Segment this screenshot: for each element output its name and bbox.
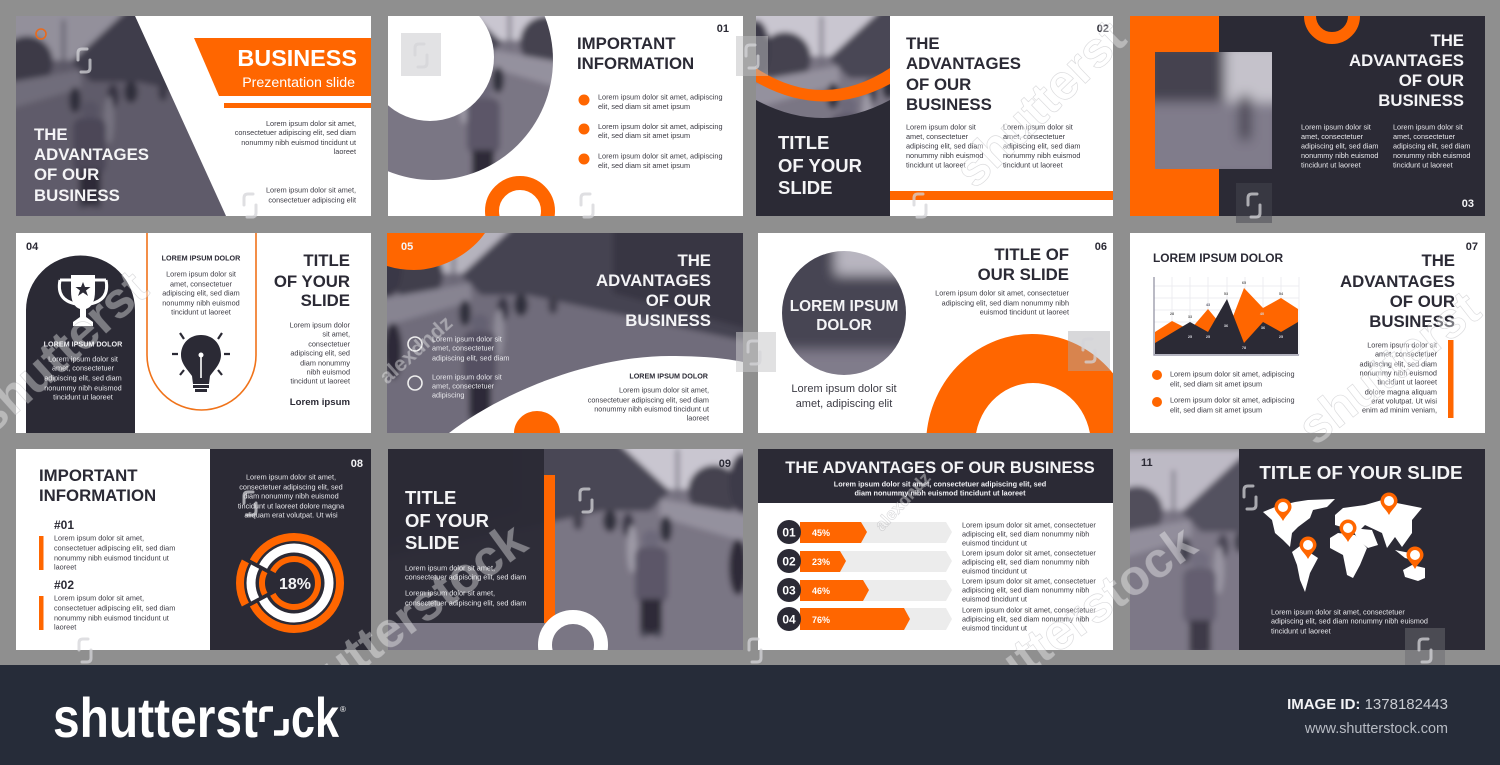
- icon: small orange ring: [36, 29, 46, 39]
- heading: BUSINESS: [906, 95, 992, 114]
- heading: OF OUR: [1390, 292, 1455, 311]
- orange arc band: [756, 68, 890, 102]
- label: LOREM IPSUM DOLOR: [44, 340, 123, 348]
- row 02 23%: adipiscing elit, sed diam nonummy nibh: [962, 558, 1089, 566]
- text block: tincidunt ut laoreet dolore magna: [238, 502, 345, 510]
- item #01: laoreet: [54, 562, 76, 572]
- text block: consectetuer: [308, 340, 351, 348]
- white curved panel: [449, 356, 743, 433]
- caption: amet, adipiscing elit: [796, 398, 892, 410]
- list item: [408, 372, 502, 400]
- item #01: Lorem ipsum dolor sit amet,: [54, 534, 144, 542]
- text column: adipiscing elit, sed diam: [1393, 142, 1470, 150]
- text column: amet, consectetuer: [1301, 132, 1364, 141]
- row 01 45%: Lorem ipsum dolor sit amet, consectetuer: [962, 520, 1096, 530]
- text block: nonummy nibh euismod: [44, 384, 122, 392]
- orange bar: [544, 475, 555, 623]
- watermark text: alexdndz: [375, 311, 457, 389]
- text column: Lorem ipsum dolor sit: [1393, 122, 1463, 132]
- text block: adipiscing elit, sed diam nonummy nibh: [942, 298, 1069, 308]
- row 04 76%: adipiscing elit, sed diam nonummy nibh: [962, 614, 1089, 624]
- item #02: laoreet: [54, 622, 76, 632]
- area chart: 65: [1242, 281, 1246, 285]
- heading: OF OUR: [646, 291, 711, 310]
- row 03 46%: euismod tincidunt ut: [962, 594, 1027, 604]
- text block: nonummy nibh euismod: [162, 298, 240, 308]
- watermark text: shutterst: [1287, 280, 1491, 456]
- text block: amet, consectetuer: [170, 280, 233, 288]
- page number: 08: [351, 458, 363, 470]
- heading: the advantages: THE: [34, 125, 68, 144]
- area chart: 40: [1260, 312, 1264, 316]
- pin: australia: [1406, 546, 1424, 569]
- text block: dolore magna aliquam: [1365, 388, 1437, 396]
- text column: Lorem ipsum dolor sit: [1003, 122, 1073, 132]
- slide 06: circle photo and arch: [758, 233, 1113, 433]
- footer logo: shutterst: [53, 686, 258, 749]
- text column: tincidunt ut laoreet: [1301, 160, 1361, 170]
- heading: BUSINESS: [1369, 312, 1455, 331]
- heading: BUSINESS: [1378, 91, 1464, 110]
- list item: amet, consectetuer: [432, 344, 495, 352]
- text block: nonummy nibh euismod: [1360, 368, 1437, 378]
- orange arch: [926, 334, 1113, 433]
- photo: street scene: [388, 449, 743, 650]
- heading: THE: [1421, 251, 1455, 270]
- row 03 46%: 46%: [812, 586, 830, 596]
- text column: Lorem ipsum dolor sit: [906, 122, 976, 132]
- text block: Lorem ipsum dolor sit amet,: [405, 588, 495, 598]
- banner stripe: [224, 103, 371, 108]
- area chart: 28: [1170, 312, 1174, 316]
- slide 02: advantages with columns: [756, 16, 1113, 216]
- text block: aliquam erat volutpat. Ut wisi: [244, 510, 338, 520]
- text block: Lorem ipsum dolor sit amet, consectetuer: [935, 288, 1070, 298]
- heading: THE: [906, 34, 940, 53]
- chart title: LOREM IPSUM DOLOR: [1153, 251, 1284, 265]
- text block: Lorem ipsum dolor sit amet,: [266, 119, 356, 128]
- text column: nonummy nibh euismod: [1301, 151, 1378, 160]
- page number: 03: [1462, 198, 1474, 210]
- pin: south america: [1300, 536, 1316, 559]
- footer bar: [0, 665, 1500, 765]
- heading: title of your slide: TITLE: [778, 132, 829, 153]
- list item: amet, consectetuer: [432, 382, 495, 390]
- area chart: 33: [1188, 315, 1192, 319]
- dark panel: [388, 449, 544, 623]
- list item: Lorem ipsum dolor sit: [432, 334, 502, 344]
- heading: the advantages: OF OUR: [34, 165, 99, 184]
- watermark text: shutterstock: [931, 513, 1207, 735]
- row 02 23%: [777, 548, 1096, 576]
- text block: consectetuer adipiscing elit, sed diam: [405, 598, 526, 608]
- list item: adipiscing elit, sed diam: [432, 354, 509, 362]
- page number: 07: [1466, 241, 1478, 253]
- text block: amet, consectetuer: [1375, 350, 1438, 358]
- area chart: 78: [1242, 346, 1246, 350]
- heading: IMPORTANT: [39, 466, 138, 485]
- area chart: 54: [1279, 292, 1284, 296]
- text block: diam nonummy nibh euismod: [243, 492, 339, 500]
- row 01 45%: 45%: [812, 528, 830, 538]
- icon: trophy: [59, 275, 107, 326]
- heading: ADVANTAGES: [1340, 272, 1455, 291]
- text column: tincidunt ut laoreet: [906, 160, 966, 170]
- watermark text: alexdndz: [871, 469, 935, 535]
- text column: nonummy nibh euismod: [906, 151, 983, 160]
- orange side panel: [1130, 16, 1219, 216]
- caption: Lorem ipsum dolor sit: [791, 383, 897, 395]
- text block: adipiscing elit, sed diam: [44, 374, 122, 382]
- text block: diam nonummy: [300, 358, 350, 368]
- text column: nonummy nibh euismod: [1003, 151, 1080, 160]
- area chart: [1154, 277, 1299, 355]
- text block: consectetuer adipiscing elit, sed: [239, 482, 343, 492]
- item #02: #02: [54, 578, 74, 592]
- list item: [408, 334, 509, 362]
- subheading: Lorem ipsum dolor sit amet, consectetuer adipiscing elit, sed: [834, 480, 1046, 488]
- page number: 04: [26, 241, 39, 253]
- item #02: Lorem ipsum dolor sit amet,: [54, 594, 144, 602]
- area chart: 53: [1224, 292, 1228, 296]
- item #02: consectetuer adipiscing elit, sed diam: [54, 604, 175, 612]
- text block: euismod tincidunt ut laoreet: [980, 308, 1069, 316]
- heading: SLIDE: [301, 291, 350, 310]
- row 02 23%: euismod tincidunt ut: [962, 566, 1027, 576]
- subheading: diam nonummy nibh euismod tincidunt ut laoreet: [854, 488, 1026, 498]
- text block: adipiscing elit, sed diam nonummy nibh euismod: [1271, 616, 1428, 626]
- watermark text: shutterst: [944, 9, 1137, 198]
- heading: the advantages: ADVANTAGES: [34, 145, 149, 164]
- text block: consectetuer adipiscing elit, sed diam: [405, 572, 526, 582]
- heading: OF YOUR: [405, 510, 489, 531]
- row 01 45%: adipiscing elit, sed diam nonummy nibh: [962, 530, 1089, 538]
- text column: adipiscing elit, sed diam: [906, 142, 983, 150]
- heading: ADVANTAGES: [1349, 51, 1464, 70]
- heading: TITLE: [303, 251, 350, 270]
- heading: TITLE OF: [994, 245, 1069, 264]
- text block: tincidunt ut laoreet: [171, 308, 231, 316]
- page number: 05: [401, 241, 413, 253]
- area chart: 43: [1206, 303, 1210, 307]
- pin: africa: [1340, 520, 1356, 542]
- area chart: 25: [1279, 335, 1283, 339]
- text block: sit amet,: [322, 330, 350, 338]
- text block: erat volutpat. Ut wisi: [1371, 396, 1437, 406]
- text block: nibh euismod: [307, 368, 350, 376]
- text block: tincidunt ut laoreet: [1271, 626, 1331, 636]
- row 03 46%: [777, 576, 1096, 604]
- slide 04: trophy and bulb: [16, 233, 371, 433]
- item #02: nonummy nibh euismod tincidunt ut: [54, 614, 169, 622]
- watermark marks: [78, 33, 1445, 670]
- heading: OF YOUR: [274, 272, 350, 291]
- item #01: #01: [54, 518, 74, 532]
- bullet list: [578, 92, 723, 170]
- slide 01: important information: [388, 16, 743, 216]
- heading: TITLE: [405, 487, 456, 508]
- bullet list: elit, sed diam sit amet ipsum: [1170, 380, 1262, 388]
- photo: street background: [387, 233, 743, 433]
- white ring: [538, 610, 608, 650]
- text column: adipiscing elit, sed diam: [1301, 142, 1378, 150]
- text column: amet, consectetuer: [906, 132, 969, 141]
- heading: title of your slide: SLIDE: [778, 177, 832, 198]
- bullet list: Lorem ipsum dolor sit amet, adipiscing: [598, 122, 723, 131]
- text block: nonummy nibh euismod tincidunt ut: [241, 138, 356, 147]
- text column: tincidunt ut laoreet: [1003, 160, 1063, 170]
- row 02 23%: 23%: [812, 557, 830, 567]
- bullet list: Lorem ipsum dolor sit amet, adipiscing: [598, 152, 723, 160]
- heading: BUSINESS: [625, 311, 711, 330]
- orange bar: [1448, 340, 1454, 418]
- row 04 76%: 04: [782, 612, 796, 626]
- text block: Lorem ipsum dolor sit: [48, 354, 118, 364]
- bullet list: Lorem ipsum dolor sit amet, adipiscing: [1170, 396, 1295, 404]
- slide 05: full photo: [387, 233, 743, 433]
- slide: business title: [16, 16, 371, 216]
- banner: business: [194, 38, 371, 96]
- dark panel: [210, 449, 371, 650]
- orange corner shape: [387, 233, 485, 270]
- row 01 45%: euismod tincidunt ut: [962, 538, 1027, 548]
- icon: light bulb: [172, 333, 230, 392]
- heading: ADVANTAGES: [596, 271, 711, 290]
- orange ring: [1310, 0, 1354, 38]
- area chart: 25: [1188, 335, 1192, 339]
- slide 11: world map: [1130, 449, 1485, 650]
- pin: north america: [1274, 498, 1292, 521]
- text block: laoreet: [687, 414, 709, 422]
- heading: THE: [1430, 31, 1464, 50]
- circle label: LOREM IPSUM: [790, 298, 898, 315]
- row 02 23%: Lorem ipsum dolor sit amet, consectetuer: [962, 548, 1096, 558]
- label: LOREM IPSUM DOLOR: [162, 254, 241, 262]
- dark panel: [1239, 449, 1485, 650]
- world map: [1263, 499, 1425, 592]
- item #01: [39, 518, 175, 572]
- bullet list: Lorem ipsum dolor sit amet, adipiscing: [1170, 370, 1295, 378]
- row 01 45%: 01: [782, 526, 796, 540]
- footer logo: ®: [340, 705, 346, 714]
- heading: INFORMATION: [577, 54, 694, 73]
- heading: TITLE OF YOUR SLIDE: [1259, 462, 1463, 483]
- item #01: nonummy nibh euismod tincidunt ut: [54, 554, 169, 562]
- text block: tincidunt ut laoreet: [53, 392, 113, 402]
- text column: tincidunt ut laoreet: [1393, 160, 1453, 170]
- heading: THE ADVANTAGES OF OUR BUSINESS: [785, 458, 1095, 477]
- text column: amet, consectetuer: [1393, 132, 1456, 141]
- text block: adipiscing elit, sed: [290, 348, 350, 358]
- item #02: [39, 578, 175, 632]
- photo: blurred square: [1155, 52, 1272, 169]
- photo: top arc: [756, 16, 890, 118]
- heading: OUR SLIDE: [978, 265, 1069, 284]
- photo: street crop: [1130, 449, 1239, 650]
- area chart: 25: [1206, 335, 1210, 339]
- row 03 46%: adipiscing elit, sed diam nonummy nibh: [962, 586, 1089, 594]
- row 01 45%: [777, 520, 1096, 548]
- dark arch panel: [26, 255, 135, 433]
- bullet list: elit, sed diam sit amet ipsum: [598, 131, 690, 140]
- bullet list: elit, sed diam sit amet ipsum: [1170, 406, 1262, 414]
- row 04 76%: 76%: [812, 615, 830, 625]
- row 02 23%: 02: [782, 554, 796, 568]
- text block: Lorem ipsum dolor sit amet,: [619, 386, 709, 394]
- page number: 02: [1097, 23, 1109, 35]
- photo: circular crop: [388, 16, 555, 216]
- dark side panel: [756, 16, 890, 216]
- text column: amet, consectetuer: [1003, 132, 1066, 141]
- text block: adipiscing elit, sed diam: [162, 288, 240, 298]
- circle label: DOLOR: [816, 317, 872, 334]
- row 04 76%: Lorem ipsum dolor sit amet, consectetuer: [962, 606, 1096, 614]
- row 04 76%: euismod tincidunt ut: [962, 624, 1027, 632]
- donut chart: [240, 537, 340, 629]
- heading: ADVANTAGES: [906, 54, 1021, 73]
- text block: adipiscing elit, sed diam: [1360, 360, 1437, 368]
- watermark text: shutterstock: [261, 511, 537, 733]
- bullet list: elit, sed diam sit amet ipsum: [598, 161, 690, 170]
- bullet list: [1152, 370, 1295, 414]
- row 04 76%: [777, 606, 1096, 632]
- area chart: 36: [1224, 324, 1228, 328]
- heading: business: BUSINESS: [237, 45, 357, 71]
- heading: SLIDE: [405, 532, 459, 553]
- heading: IMPORTANT: [577, 34, 676, 53]
- text block: Lorem ipsum dolor sit amet,: [266, 186, 356, 194]
- heading: the advantages: BUSINESS: [34, 186, 120, 205]
- pin: asia: [1380, 492, 1398, 515]
- row 03 46%: Lorem ipsum dolor sit amet, consectetuer: [962, 576, 1096, 586]
- heading: THE: [677, 251, 711, 270]
- footer logo: ck: [291, 686, 340, 749]
- heading: OF OUR: [1399, 71, 1464, 90]
- orange stripe: [890, 191, 1113, 200]
- image id: IMAGE ID: 1378182443: [1287, 696, 1448, 713]
- donut chart: 18%: [279, 576, 311, 593]
- heading: OF OUR: [906, 75, 971, 94]
- text block: consectetuer adipiscing elit, sed diam: [588, 396, 709, 404]
- slide 09: photo with dark panel: [388, 449, 743, 650]
- item #01: consectetuer adipiscing elit, sed diam: [54, 544, 175, 552]
- heading: title of your slide: OF YOUR: [778, 155, 862, 176]
- page number: 06: [1095, 241, 1107, 253]
- row 03 46%: 03: [782, 584, 796, 598]
- text block: laoreet: [334, 147, 356, 156]
- text column: nonummy nibh euismod: [1393, 151, 1470, 160]
- photo: diagonal street scene: [16, 16, 226, 216]
- header band: [758, 449, 1113, 503]
- subheading: Prezentation slide: [242, 75, 355, 91]
- text block: Lorem ipsum dolor sit amet, consectetuer: [1271, 608, 1405, 616]
- page number: 01: [717, 23, 729, 35]
- page number: 11: [1141, 457, 1153, 469]
- text block: nonummy nibh euismod tincidunt ut: [594, 404, 709, 414]
- heading: INFORMATION: [39, 486, 156, 505]
- orange outlined arch: [147, 233, 256, 410]
- text block: Lorem ipsum dolor sit: [1367, 340, 1437, 350]
- text block: consectetuer adipiscing elit: [268, 196, 356, 204]
- list item: Lorem ipsum dolor sit: [432, 372, 502, 382]
- text block: enim ad minim veniam,: [1362, 406, 1437, 414]
- bullet list: Lorem ipsum dolor sit amet, adipiscing: [598, 92, 723, 102]
- text block: Lorem ipsum dolor sit amet,: [405, 564, 495, 572]
- slide 08: donut chart: [16, 449, 371, 650]
- area chart: 36: [1261, 326, 1265, 330]
- text column: Lorem ipsum dolor sit: [1301, 122, 1371, 132]
- text column: adipiscing elit, sed diam: [1003, 142, 1080, 150]
- label: LOREM IPSUM DOLOR: [629, 372, 709, 380]
- text block: Lorem ipsum dolor: [290, 320, 351, 330]
- slide 03: dark advantages: [1130, 0, 1485, 216]
- slide 07: area chart: [1130, 233, 1485, 433]
- photo: blurred circle: [782, 251, 906, 375]
- site url: www.shutterstock.com: [1304, 721, 1448, 737]
- text block: Lorem ipsum dolor sit amet,: [246, 472, 336, 482]
- slide 10: progress bars: [758, 449, 1113, 650]
- text block: Lorem ipsum dolor sit: [166, 270, 236, 278]
- page number: 09: [719, 458, 731, 470]
- text block: tincidunt ut laoreet: [290, 376, 350, 386]
- caption: Lorem ipsum: [290, 397, 350, 408]
- text block: amet, consectetuer: [52, 364, 115, 372]
- orange half circle: [514, 411, 560, 433]
- text block: tincidunt ut laoreet: [1377, 378, 1437, 386]
- text block: consectetuer adipiscing elit, sed diam: [235, 128, 356, 137]
- bullet list: elit, sed diam sit amet ipsum: [598, 102, 690, 111]
- list item: adipiscing: [432, 390, 464, 400]
